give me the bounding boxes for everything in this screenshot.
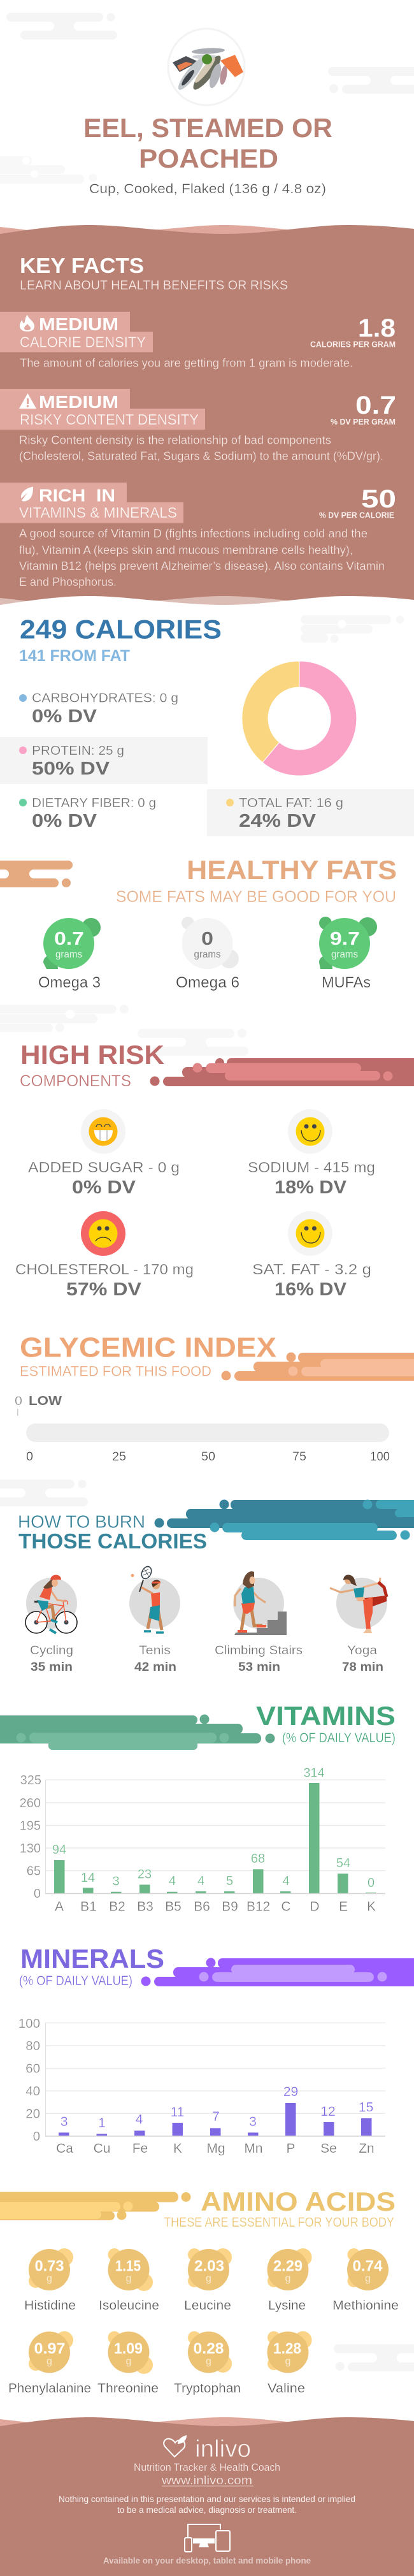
icon: food photo of fish [168, 29, 245, 105]
serving subtitle: Cup, Cooked, Flaked (136 g / 4.8 oz) [89, 182, 326, 196]
minerals heading: MINERALS [20, 1944, 164, 1974]
footer tagline: Nutrition Tracker & Health Coach [134, 2461, 280, 2473]
legend: carbohydrates: 0% DV [32, 706, 97, 727]
amino: phenylalanine: Phenylalanine [8, 2382, 91, 2396]
activity: climbing stairs: 53 min [238, 1661, 280, 1674]
panel: vitamins [0, 1701, 396, 1914]
amino: valine: g [285, 2356, 290, 2367]
cloud: burn [0, 1480, 96, 1506]
amino: leucine [184, 2248, 232, 2313]
disclaimer: to be a medical advice, diagnosis or treatment. [117, 2505, 297, 2515]
fact: calorie density: CALORIE DENSITY [20, 334, 146, 351]
bar chart: minerals: 60 [25, 2062, 40, 2076]
bar chart: minerals: 11 [171, 2105, 184, 2120]
fact: rich in vitamins and minerals: A good source of Vitamin D (fights infections including cold and the [19, 527, 368, 540]
amino: histidine [24, 2248, 76, 2313]
bar chart: vitamins: 14 [81, 1871, 95, 1885]
amino: threonine: 1.09 [114, 2340, 143, 2357]
bar chart: vitamins: 130 [20, 1842, 41, 1856]
glycemic marker [15, 1394, 62, 1416]
icon: flame [20, 315, 34, 331]
fact: calorie density: MEDIUM [39, 314, 118, 334]
legend: dietary fiber: 0% DV [32, 811, 97, 831]
glycemic index heading: ESTIMATED FOR THIS FOOD [20, 1364, 211, 1379]
fact: risky content density: % DV PER GRAM [331, 417, 396, 426]
calories heading: 141 FROM FAT [19, 647, 130, 665]
title: POACHED [139, 143, 278, 173]
fact: risky content density: 0.7 [355, 391, 396, 419]
bar chart: vitamins: 65 [27, 1864, 41, 1878]
bar chart: vitamins: B2 [109, 1900, 125, 1914]
bar chart: vitamins: 3 [112, 1875, 120, 1889]
key facts heading: LEARN ABOUT HEALTH BENEFITS OR RISKS [20, 279, 288, 293]
fact: calorie density [0, 312, 396, 370]
bar chart: minerals [18, 2016, 385, 2156]
icon: devices [185, 2524, 230, 2552]
bar chart: minerals: 15 [359, 2100, 373, 2115]
item: added sugar [28, 1109, 180, 1198]
bar chart: minerals: K [173, 2141, 182, 2156]
cloud: amino acids [334, 2345, 414, 2371]
panel: glycemic index [15, 1332, 414, 1464]
decorative shape: healthy fats [0, 861, 80, 887]
bar chart: vitamins: B9 [222, 1900, 238, 1914]
bar chart: minerals: P [286, 2141, 296, 2156]
vitamins heading: VITAMINS [256, 1701, 396, 1731]
wave: key facts top [0, 225, 414, 249]
activity: tennis: 42 min [134, 1661, 176, 1674]
bar chart: minerals: 20 [25, 2106, 40, 2121]
bar chart: vitamins: B1 [80, 1900, 97, 1914]
decorative shape: burn [154, 1499, 414, 1540]
amino: lysine: 2.29 [273, 2258, 303, 2274]
calories heading: 249 CALORIES [20, 615, 222, 644]
activity: climbing stairs: Climbing Stairs [215, 1644, 303, 1657]
fact: risky content density [0, 389, 396, 463]
panel: healthy fats [0, 855, 397, 991]
activity: cycling: 35 min [31, 1661, 73, 1674]
bar chart: minerals: 40 [25, 2084, 40, 2099]
bar chart: vitamins: 94 [52, 1843, 66, 1857]
high risk heading [20, 1040, 164, 1090]
amino: methionine: 0.74 [353, 2258, 383, 2274]
fact: rich in vitamins and minerals: flu), Vitamin A (keeps skin and mucous membrane cells healthy), [19, 544, 353, 557]
glycemic index heading: GLYCEMIC INDEX [20, 1332, 276, 1363]
fact: rich in vitamins and minerals: Vitamin B12 (helps prevent Alzheimer’s disease). Also contains Vitamin [19, 560, 385, 572]
amino: tryptophan: Tryptophan [174, 2382, 241, 2396]
activity: tennis: Tenis [139, 1644, 171, 1657]
amino: isoleucine: Isoleucine [99, 2299, 159, 2313]
glycemic marker: LOW [29, 1394, 62, 1408]
donut chart [242, 661, 357, 776]
availability note: Available on your desktop, tablet and mobile phone [103, 2556, 311, 2566]
high risk heading: COMPONENTS [20, 1072, 131, 1090]
glycemic scale bar: 0 [26, 1450, 33, 1464]
bar chart: vitamins: 4 [197, 1874, 204, 1888]
bar chart: vitamins: 5 [226, 1874, 233, 1888]
decorative shape: vitamins [0, 1715, 275, 1750]
amino: threonine: Threonine [97, 2382, 159, 2396]
omega 6 badge: Omega 6 [176, 974, 239, 991]
panel: key facts [0, 225, 414, 609]
panel: how to burn those calories [0, 1480, 414, 1674]
bar chart: vitamins: A [55, 1900, 64, 1914]
item: added sugar: 0% DV [72, 1177, 136, 1198]
bar chart: minerals: 29 [283, 2085, 298, 2099]
legend: total fat [207, 789, 414, 836]
bar chart: vitamins: K [367, 1900, 376, 1914]
item: sodium: SODIUM - 415 mg [248, 1159, 375, 1175]
decorative shape: amino acids [0, 2192, 191, 2220]
omega 3 badge [38, 918, 101, 991]
item: saturated fat [252, 1211, 371, 1300]
bar chart: minerals: 100 [18, 2016, 40, 2031]
burn heading: HOW TO BURN [18, 1512, 145, 1532]
mufas badge [319, 917, 377, 991]
wave: key facts bottom [0, 596, 414, 609]
panel: high risk components [0, 1005, 414, 1300]
amino: methionine: Methionine [332, 2299, 399, 2313]
omega 6 badge [176, 917, 242, 991]
item: saturated fat: SAT. FAT - 3.2 g [252, 1261, 371, 1277]
glycemic scale bar: 75 [292, 1450, 306, 1464]
bar chart: vitamins: B5 [165, 1900, 182, 1914]
legend: carbohydrates [19, 692, 178, 727]
bar chart: vitamins: 260 [20, 1796, 41, 1810]
mufas badge: grams [331, 949, 358, 960]
legend: dietary fiber [19, 796, 156, 831]
amino acids heading [164, 2187, 396, 2230]
amino: valine: 1.28 [273, 2340, 301, 2357]
item: cholesterol: CHOLESTEROL - 170 mg [15, 1261, 194, 1277]
glycemic marker: 0 [15, 1395, 22, 1408]
bar chart: vitamins: 68 [251, 1852, 265, 1866]
fact: calorie density: The amount of calories you are getting from 1 gram is moderate. [20, 357, 353, 370]
logo: inlivo [164, 2435, 251, 2463]
bar chart: minerals: 3 [249, 2114, 257, 2129]
amino: histidine: Histidine [24, 2299, 76, 2313]
glycemic scale bar: 100 [370, 1450, 390, 1464]
key facts heading: KEY FACTS [20, 254, 144, 277]
omega 3 badge: grams [55, 949, 82, 960]
decorative shape: minerals [141, 1958, 414, 1986]
bar chart: vitamins: B6 [194, 1900, 210, 1914]
vitamins heading: (% OF DAILY VALUE) [282, 1731, 396, 1745]
mufas badge: MUFAs [322, 974, 371, 991]
bar chart: minerals: Cu [94, 2141, 110, 2156]
fact: risky content density: MEDIUM [39, 392, 118, 412]
legend: dietary fiber: DIETARY FIBER: 0 g [32, 796, 156, 810]
key facts background [0, 245, 414, 602]
header section [0, 13, 414, 196]
bar chart: vitamins: E [339, 1900, 348, 1914]
bar chart: minerals: Ca [56, 2141, 73, 2156]
cloud: header right [328, 67, 414, 94]
cloud: header top left [6, 13, 125, 40]
bar chart: vitamins: B3 [137, 1900, 153, 1914]
glycemic scale bar: 25 [112, 1450, 126, 1464]
wave: footer [0, 2417, 414, 2441]
fact: rich in vitamins and minerals: E and Phosphorus. [19, 576, 117, 588]
activity: yoga [330, 1575, 387, 1674]
item: sodium [248, 1109, 375, 1198]
bar chart: vitamins: 4 [169, 1874, 176, 1888]
amino: threonine: g [126, 2356, 131, 2367]
website link: www.inlivo.com [161, 2474, 252, 2487]
cloud: calories [301, 615, 404, 643]
omega 3 badge: 0.7 [54, 929, 84, 949]
item: cholesterol: 57% DV [66, 1279, 142, 1300]
legend: carbohydrates: CARBOHYDRATES: 0 g [32, 692, 178, 706]
bar chart: minerals: 80 [25, 2039, 40, 2053]
fact: rich in vitamins and minerals: % DV PER CALORIE [319, 510, 394, 520]
disclaimer: Nothing contained in this presentation and our services is intended or implied [59, 2494, 355, 2504]
amino: phenylalanine [8, 2331, 91, 2396]
logo: inlivo: inlivo [195, 2436, 251, 2463]
amino: histidine: 0.73 [34, 2258, 64, 2274]
omega 6 badge: grams [194, 949, 220, 960]
omega 6 badge: 0 [201, 929, 213, 949]
legend: protein: 50% DV [32, 759, 110, 779]
amino: valine [268, 2331, 312, 2396]
decorative shape: glycemic [222, 1353, 414, 1381]
amino: leucine: g [206, 2273, 211, 2284]
bar chart: minerals: 0 [33, 2129, 40, 2144]
bar chart: vitamins: 325 [20, 1773, 41, 1787]
bar chart: minerals: 1 [98, 2116, 106, 2130]
item: cholesterol [15, 1211, 194, 1300]
bar chart: vitamins: 195 [20, 1819, 41, 1833]
bar chart: vitamins: B12 [246, 1900, 270, 1914]
bar chart: vitamins: 0 [34, 1887, 41, 1901]
glycemic scale bar [26, 1423, 390, 1464]
cloud: header left [0, 156, 97, 184]
key facts heading [20, 254, 288, 293]
bar chart: minerals: Mg [206, 2141, 225, 2156]
bar chart: vitamins: 23 [138, 1868, 152, 1882]
bar chart: vitamins: 314 [303, 1766, 325, 1780]
fact: rich in vitamins and minerals: VITAMINS & MINERALS [19, 504, 177, 521]
bar chart: minerals: 12 [320, 2104, 336, 2119]
amino: lysine: Lysine [268, 2299, 306, 2313]
activity: cycling [25, 1575, 77, 1674]
panel: calories [0, 615, 414, 836]
fact: risky content density: (Cholesterol, Saturated Fat, Sugars & Sodium) to the amount (%DV/gr). [19, 450, 383, 463]
amino: tryptophan [174, 2331, 241, 2396]
activity: yoga: Yoga [347, 1644, 377, 1657]
icon: leaf [21, 487, 33, 501]
legend: total fat: TOTAL FAT: 16 g [239, 796, 343, 810]
amino: isoleucine: 1.15 [115, 2258, 141, 2274]
disclaimer [59, 2494, 355, 2515]
title: EEL, STEAMED OR [83, 113, 332, 143]
legend: protein: PROTEIN: 25 g [32, 744, 124, 758]
healthy fats heading: HEALTHY FATS [187, 855, 397, 885]
title [83, 113, 332, 173]
amino: histidine: g [46, 2273, 52, 2284]
amino: lysine [268, 2248, 312, 2313]
fact: rich in vitamins and minerals: 50 [361, 485, 396, 513]
item: saturated fat: 16% DV [275, 1279, 347, 1300]
fact: calorie density: 1.8 [358, 314, 396, 342]
legend: total fat: 24% DV [239, 811, 317, 831]
legend: protein [0, 737, 208, 784]
amino: phenylalanine: 0.97 [34, 2340, 65, 2357]
amino: threonine [97, 2331, 159, 2396]
activity: climbing stairs [215, 1571, 303, 1674]
bar chart: minerals: 4 [136, 2113, 143, 2127]
panel: amino acids [0, 2187, 414, 2396]
amino: leucine: Leucine [184, 2299, 231, 2313]
footer background [0, 2438, 414, 2576]
decorative shape: high risk [150, 1058, 414, 1086]
amino: phenylalanine: g [46, 2356, 52, 2367]
bar chart: minerals: 7 [212, 2109, 220, 2124]
bar chart: minerals: Mn [244, 2141, 263, 2156]
amino: lysine: g [285, 2273, 290, 2284]
bar chart: minerals: Se [320, 2141, 337, 2156]
fact: rich in vitamins and minerals: RICH IN [39, 486, 115, 505]
panel: minerals [18, 1944, 414, 2156]
panel: footer [0, 2417, 414, 2576]
bar chart: vitamins: 4 [282, 1874, 290, 1888]
bar chart: minerals: Zn [359, 2141, 375, 2156]
glycemic index heading [20, 1332, 276, 1379]
clouds: high risk [0, 1005, 257, 1056]
vitamins heading [256, 1701, 396, 1745]
minerals heading: (% OF DAILY VALUE) [19, 1974, 132, 1988]
amino: isoleucine: g [126, 2273, 131, 2284]
bar chart: vitamins: D [310, 1900, 320, 1914]
glycemic scale bar: 50 [201, 1450, 215, 1464]
healthy fats heading: SOME FATS MAY BE GOOD FOR YOU [116, 888, 396, 906]
omega 3 badge: Omega 3 [38, 974, 101, 991]
amino: methionine: g [365, 2273, 371, 2284]
minerals heading [19, 1944, 164, 1988]
healthy fats heading [116, 855, 397, 906]
burn heading [18, 1512, 207, 1553]
high risk heading: HIGH RISK [20, 1040, 164, 1070]
amino: tryptophan: g [206, 2356, 211, 2367]
amino: methionine [332, 2248, 399, 2313]
calories heading [19, 615, 222, 665]
fact: risky content density: RISKY CONTENT DENSITY [20, 411, 199, 428]
activity: yoga: 78 min [342, 1661, 383, 1674]
fact: rich in vitamins and minerals [0, 483, 396, 588]
mufas badge: 9.7 [330, 929, 360, 949]
bar chart: vitamins: 54 [336, 1856, 350, 1870]
amino acids heading: AMINO ACIDS [201, 2187, 396, 2216]
bar chart: vitamins: C [281, 1900, 291, 1914]
icon: warning triangle [19, 393, 36, 409]
bar chart: minerals: 3 [61, 2114, 68, 2129]
amino: isoleucine [99, 2248, 159, 2313]
amino: valine: Valine [268, 2382, 305, 2396]
item: sodium: 18% DV [275, 1177, 347, 1198]
activity: cycling: Cycling [30, 1644, 73, 1657]
item: added sugar: ADDED SUGAR - 0 g [28, 1159, 180, 1175]
bar chart: vitamins [20, 1766, 385, 1914]
amino: leucine: 2.03 [194, 2258, 224, 2274]
amino: tryptophan: 0.28 [194, 2340, 224, 2357]
fact: risky content density: Risky Content density is the relationship of bad components [19, 433, 331, 446]
burn heading: THOSE CALORIES [18, 1529, 207, 1553]
bar chart: vitamins: 0 [368, 1876, 375, 1890]
activity: tennis [129, 1565, 180, 1674]
fact: calorie density: CALORIES PER GRAM [310, 340, 396, 349]
bar chart: minerals: Fe [132, 2141, 148, 2156]
